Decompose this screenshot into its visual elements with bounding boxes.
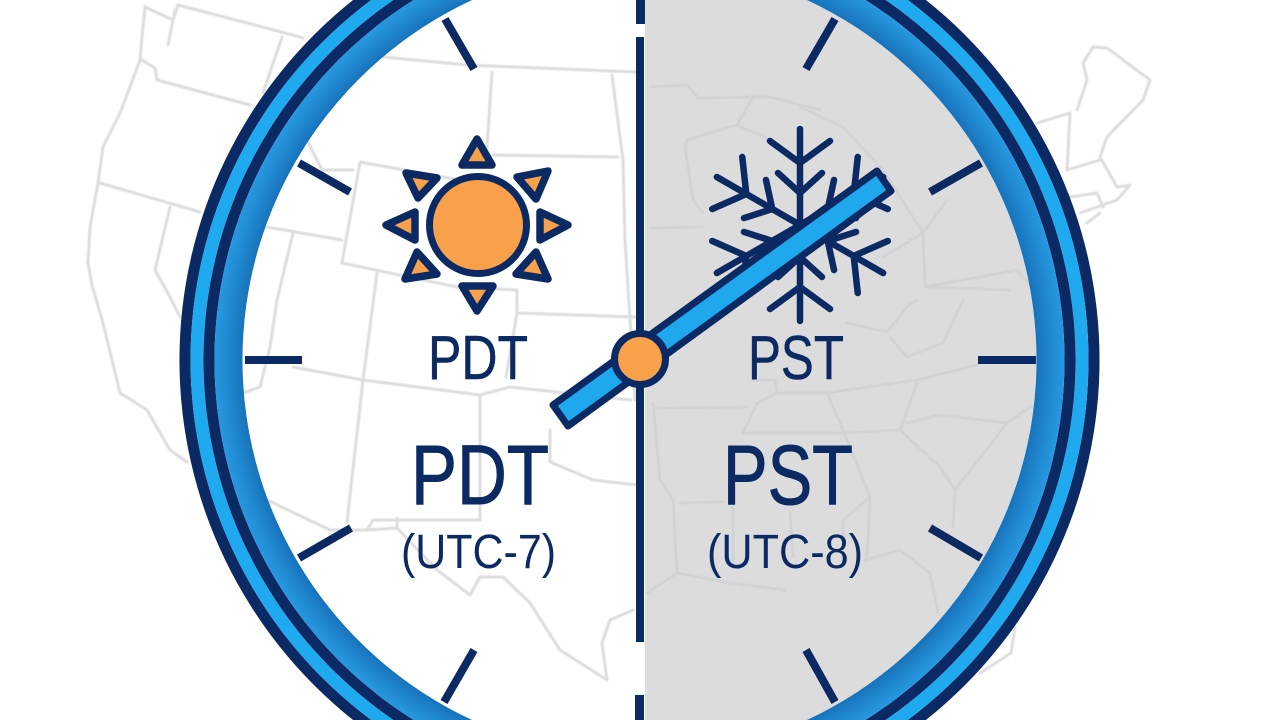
panel: grey PST half of the dial [645,0,1037,720]
small label: PDT: PDT [428,324,528,393]
small label: PST: PST [748,324,844,393]
large label: PST: PST [723,428,853,522]
offset label: UTC-7: (UTC-7) [401,526,556,579]
offset label: UTC-8: (UTC-8) [707,526,863,579]
background map of the United States [88,5,1150,680]
clock hand [553,171,891,426]
clock bezel rings [179,0,1100,720]
centre divider [635,0,645,720]
icon: snowflake [702,129,898,321]
icon: sun [386,139,568,311]
hour tick marks [245,19,1036,702]
clock pivot [614,334,666,384]
large label: PDT: PDT [411,428,549,522]
